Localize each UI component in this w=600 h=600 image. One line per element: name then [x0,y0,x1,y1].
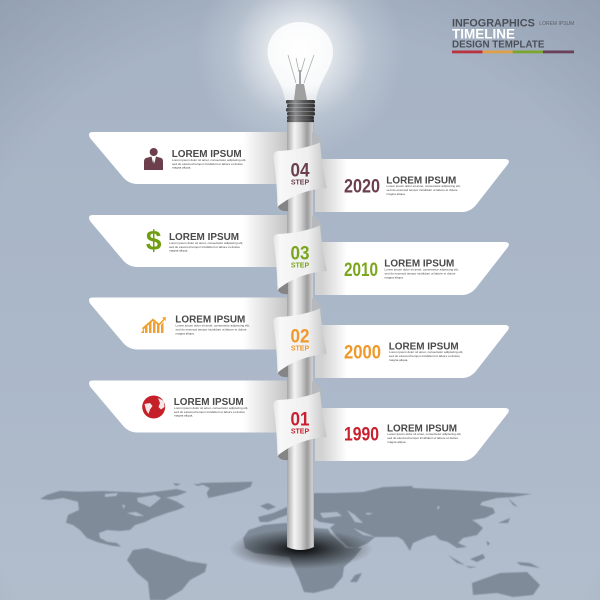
shadow of pole [229,529,373,569]
title block: LOREM IPSUM [539,21,574,27]
text: left 1: LOREM IPSUM [174,397,244,408]
text: right 2: Lorem ipsum dolor sit amet, consectetur adipiscing elit, [389,350,463,354]
text: left 2: Lorem ipsum dolor sit amet, consectetur adipiscing elit, [176,324,250,328]
text: left 3: magna aliqua. [169,249,188,253]
text: left 1: magna aliqua. [174,414,193,418]
text: left 4 [172,149,246,170]
text: left 3: Lorem ipsum dolor sit amet, consectetur adipiscing elit, [169,241,243,245]
bulb glass [268,22,333,100]
icon: person [144,148,163,170]
step 04: STEP [291,180,309,186]
text: left 4: magna aliqua. [172,166,191,170]
left ribbons [89,132,292,432]
text: left 2: LOREM IPSUM [175,315,245,326]
text: left 3: LOREM IPSUM [169,232,239,243]
step 02: 02 [290,326,310,348]
text: right 4: sed do eiusmod tempor incididunt ut labore et dolore [386,188,458,192]
step 03: 03 [290,243,310,265]
text: right 4 [386,175,461,196]
icon: growth chart [141,317,166,333]
step 04: 04 [290,160,310,182]
text: right 3 [384,259,459,279]
step 03: STEP [291,262,309,270]
step 01: STEP [291,428,309,436]
text: right 3: sed do eiusmod tempor incididunt ut labore et dolore [384,272,456,276]
North America [40,489,187,547]
text: left 4: LOREM IPSUM [172,149,242,160]
screw socket [286,100,315,122]
text: left 3: sed do eiusmod tempor incididunt ut labore et dolore [169,245,240,249]
pole [286,100,315,550]
islands [173,483,540,597]
text: right 1: magna aliqua. [387,440,406,444]
text: right 2: LOREM IPSUM [389,341,459,352]
text: left 2: sed do eiusmod tempor incididunt ut labore et dolore [176,328,247,332]
text: right 4: magna aliqua. [386,192,406,196]
title block: DESIGN TEMPLATE [452,40,545,51]
South America [127,548,207,600]
icon: dollar: $ [146,225,162,256]
year 2000: 2000 [344,343,381,364]
title block: TIMELINE [452,26,515,41]
text: right 2 [389,341,463,362]
text: right 3: LOREM IPSUM [384,259,454,270]
text: left 4: Lorem ipsum dolor sit amet, consectetur adipiscing elit, [172,158,246,162]
text: right 1: sed do eiusmod tempor incididunt ut labore et dolore [387,436,458,440]
text: right 1: LOREM IPSUM [387,423,457,434]
year 2020: 2020 [344,177,380,198]
text: left 2: magna aliqua. [176,331,195,335]
text: right 2: sed do eiusmod tempor incididunt ut labore et dolore [389,354,460,358]
text: right 4: LOREM IPSUM [386,175,456,186]
text: left 1: sed do eiusmod tempor incididunt ut labore et dolore [174,410,245,414]
text: right 2: magna aliqua. [389,358,408,362]
text: right 4: Lorem ipsum dolor sit amet, consectetur adipiscing elit, [386,184,461,188]
text: left 4: sed do eiusmod tempor incididunt ut labore et dolore [172,162,243,166]
Eurasia [258,486,532,551]
filament [288,55,314,84]
right ribbons [315,159,509,461]
Africa [243,523,362,593]
text: right 1: Lorem ipsum dolor sit amet, consectetur adipiscing elit, [387,432,462,436]
ribbon wraps around pole [273,132,327,460]
text: left 2 [175,315,250,335]
title block [452,18,574,53]
text: right 3: magna aliqua. [384,275,404,279]
light bulb [268,22,333,100]
step 02: STEP [291,346,309,352]
year 1990: 1990 [344,425,379,446]
year 2010: 2010 [344,260,378,281]
text: right 3: Lorem ipsum dolor sit amet, consectetur adipiscing elit, [384,268,459,272]
text: left 1 [174,397,248,418]
colour bar [452,50,574,53]
step 01: 01 [290,409,310,431]
text: right 1 [387,423,462,444]
text: left 1: Lorem ipsum dolor sit amet, consectetur adipiscing elit, [174,406,248,410]
title block: INFOGRAPHICS [452,18,535,30]
text: left 3 [169,232,243,253]
world map [40,482,540,600]
Greenland [199,482,253,498]
icon: globe [142,396,165,418]
inland seas and bays [105,493,440,547]
